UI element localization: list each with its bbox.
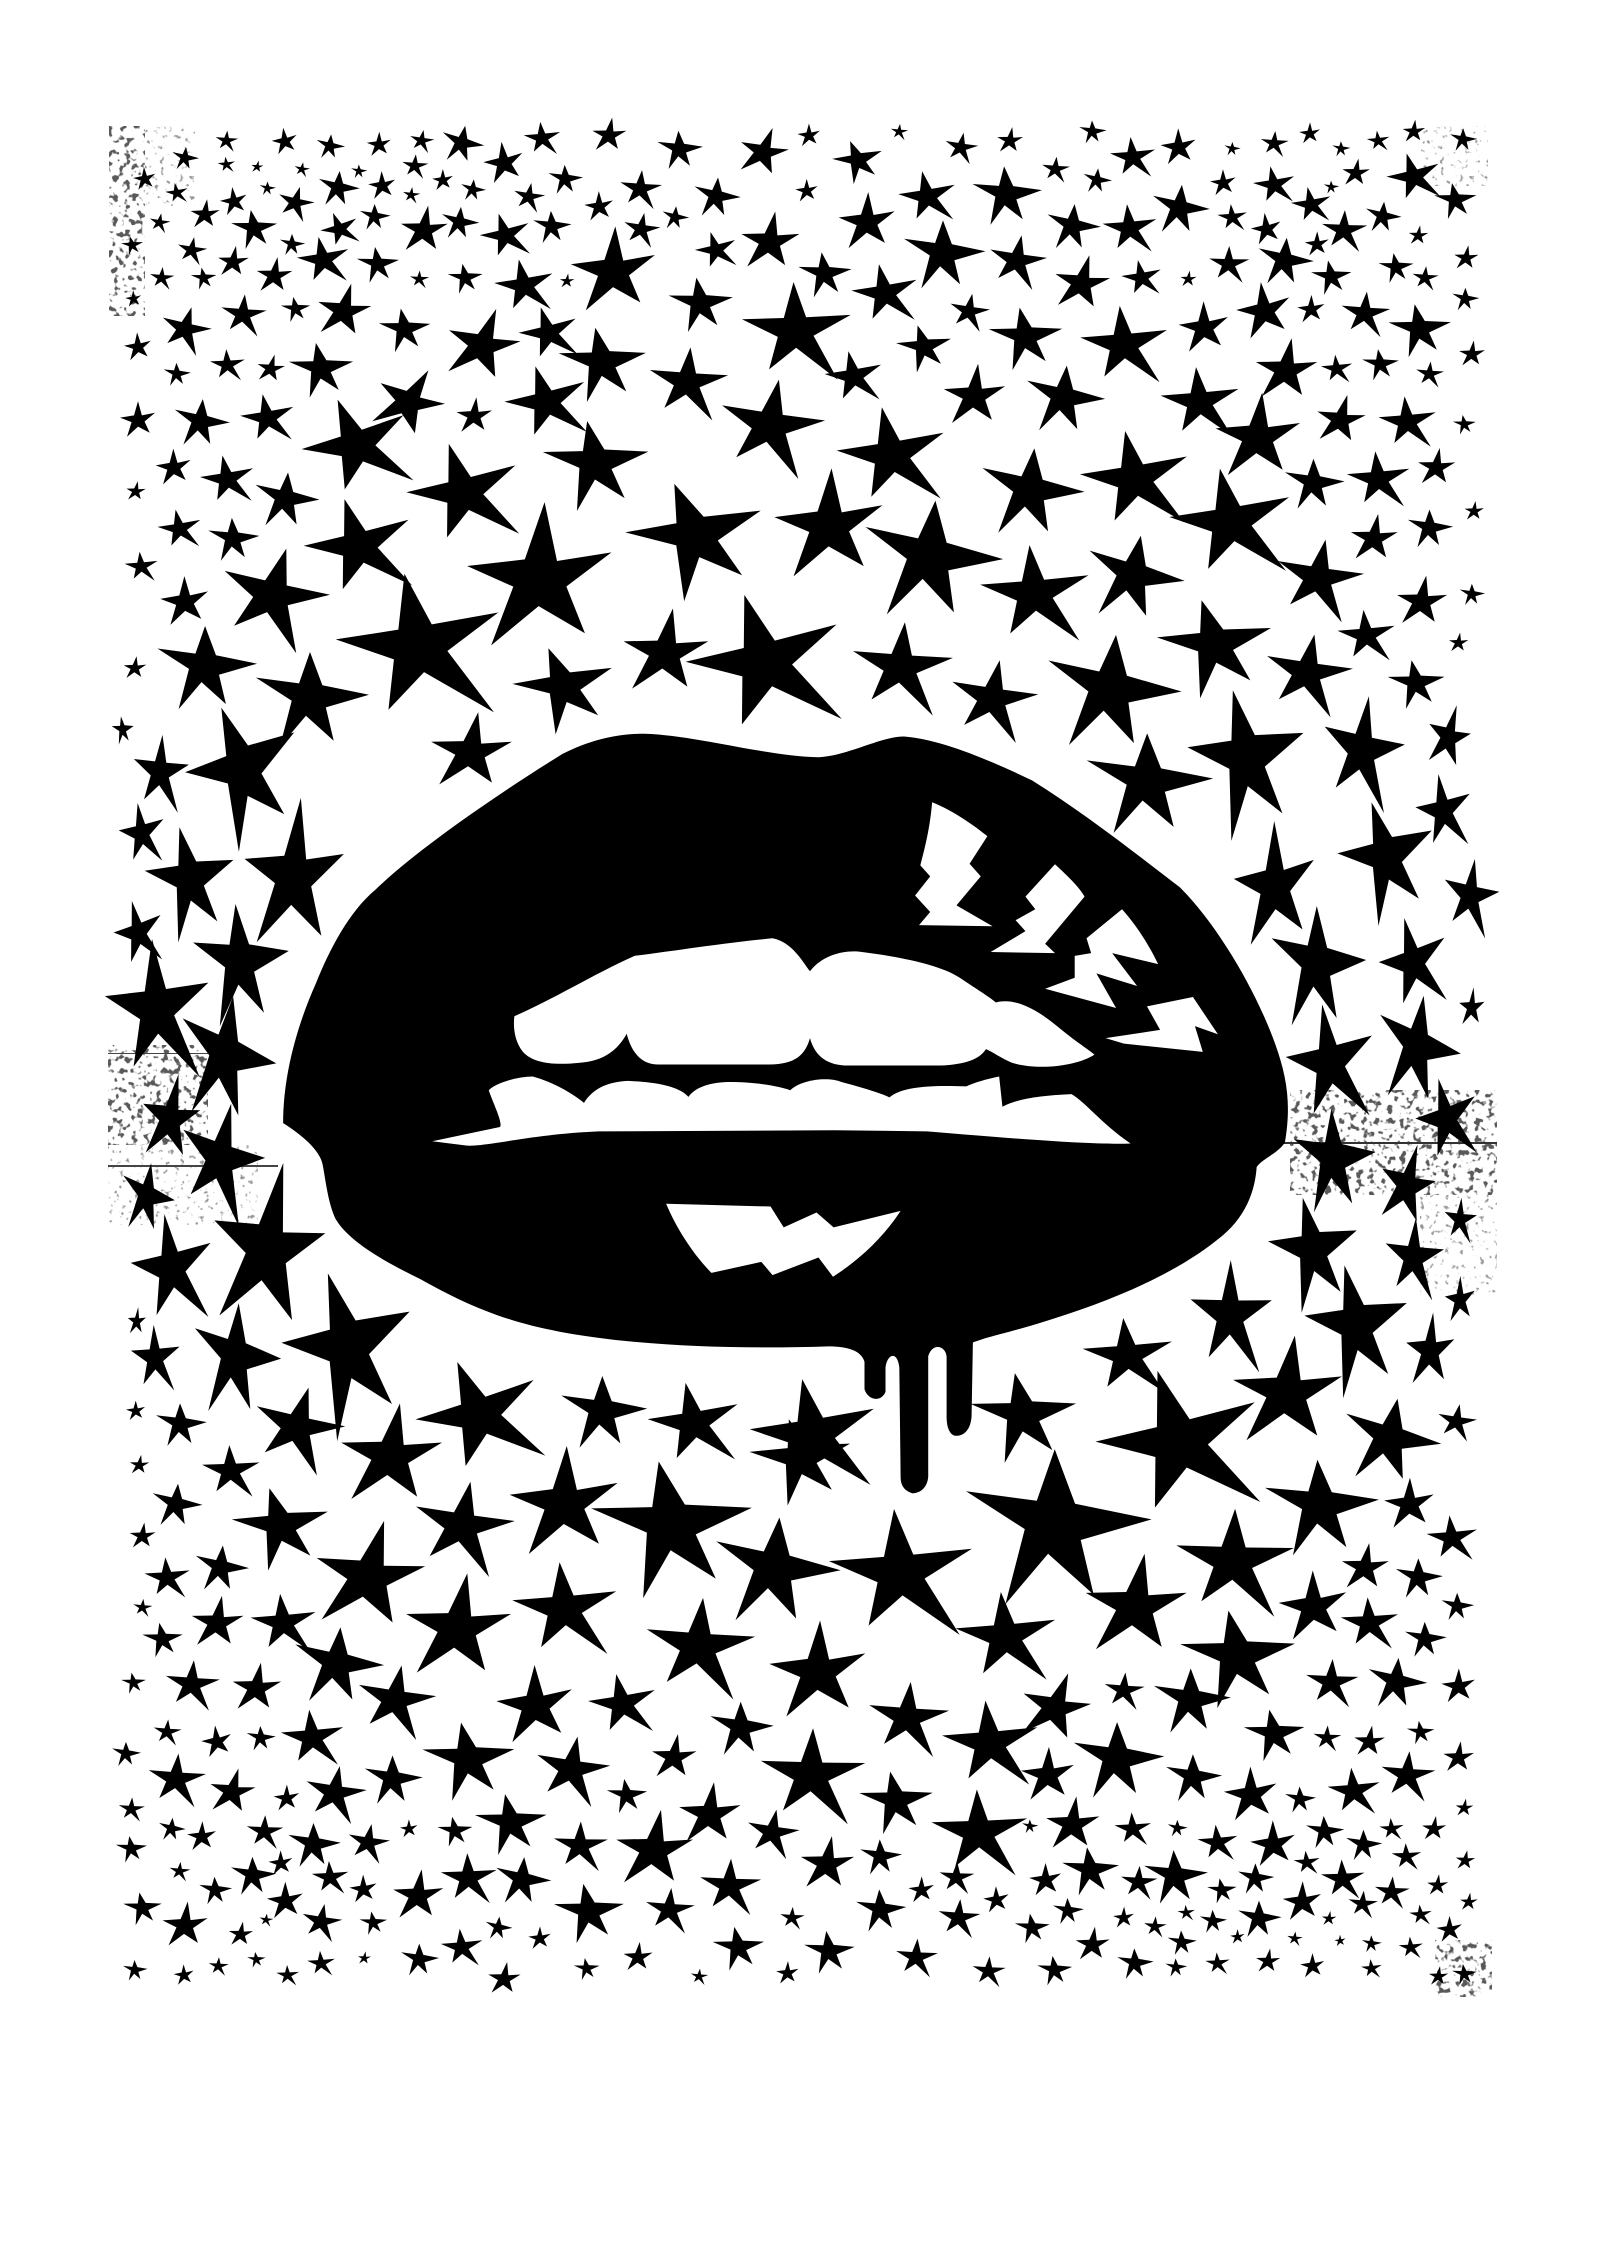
lower teeth bbox=[432, 1077, 1131, 1146]
star field: bottom left bbox=[110, 1342, 860, 1995]
star field: bottom right bbox=[742, 1333, 1480, 1987]
lightning highlight 2 bbox=[991, 864, 1085, 953]
lightning highlight 1 bbox=[915, 802, 993, 926]
star field: left side bbox=[102, 679, 429, 1453]
star above lips, upper left bbox=[427, 709, 515, 789]
star above lips, upper right bbox=[1079, 729, 1217, 840]
star beside drip bbox=[1080, 1315, 1177, 1398]
upper teeth bbox=[514, 938, 1094, 1067]
lips silhouette with drips bbox=[283, 734, 1288, 1493]
lips bbox=[283, 709, 1288, 1493]
star field: top right bbox=[772, 119, 1486, 760]
lightning highlight 3 bbox=[1045, 909, 1158, 1008]
lightning highlight 4 bbox=[1106, 997, 1218, 1052]
star field: top left bbox=[119, 116, 864, 753]
distressed print texture bbox=[108, 126, 1497, 1997]
star field: right side bbox=[1182, 675, 1503, 1405]
lower lip lightning highlight bbox=[666, 1204, 901, 1277]
